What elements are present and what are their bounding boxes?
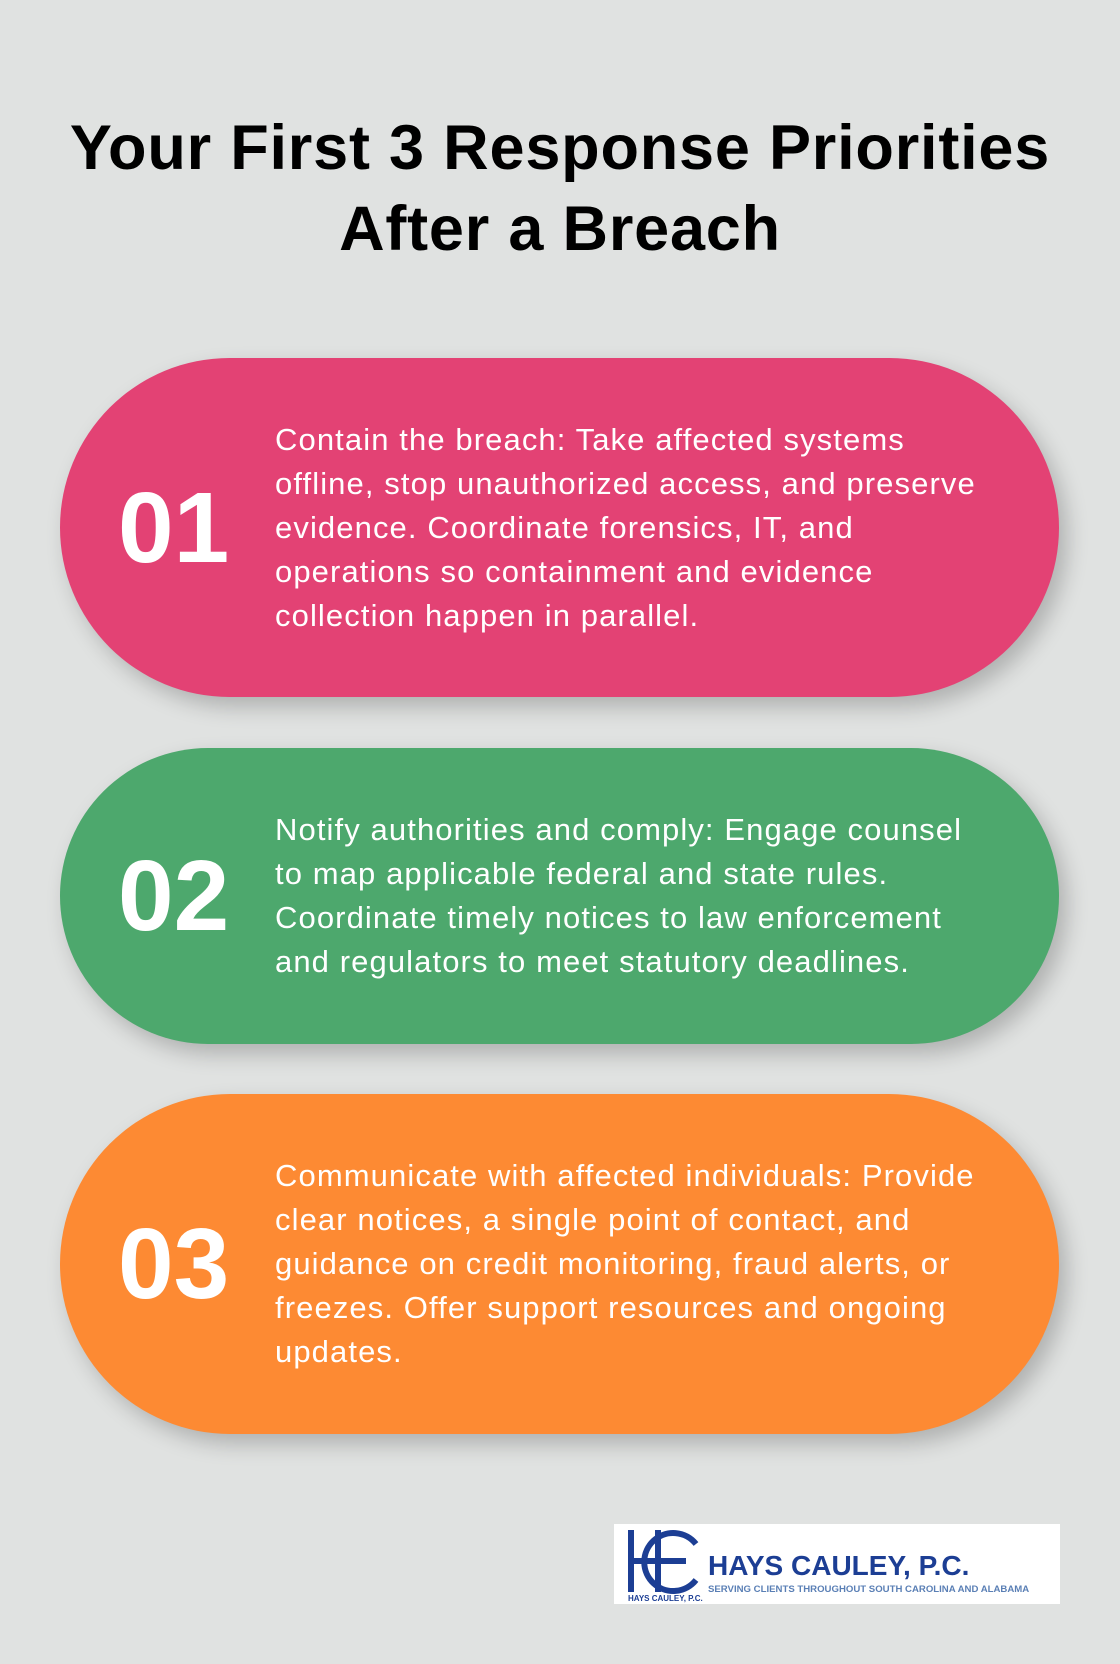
logo: SERVING CLIENTS THROUGHOUT SOUTH CAROLINA AND ALABAMA: [708, 1584, 1029, 1595]
title: Your First 3 Response Priorities: [70, 113, 1050, 183]
text: step 3: [275, 1158, 975, 1369]
text: step 2: Coordinate timely notices to law enforcement: [275, 900, 942, 935]
text: step 3: Communicate with affected individuals: Provide: [275, 1158, 975, 1193]
text: step 3: clear notices, a single point of contact, and: [275, 1202, 910, 1237]
logo: HAYS CAULEY, P.C.: [708, 1550, 969, 1581]
number 01: 01: [118, 472, 229, 584]
text: step 3: updates.: [275, 1334, 403, 1369]
text: step 2: and regulators to meet statutory deadlines.: [275, 944, 910, 979]
text: step 2: [275, 812, 962, 979]
text: step 1: Contain the breach: Take affected systems: [275, 422, 905, 456]
logo: [614, 1524, 1060, 1604]
text: step 1: offline, stop unauthorized access, and preserve: [275, 466, 976, 500]
text: step 3: guidance on credit monitoring, fraud alerts, or: [275, 1246, 950, 1281]
text: step 1: [275, 422, 976, 632]
title: [70, 113, 1050, 264]
text: step 2: Notify authorities and comply: Engage counsel: [275, 812, 962, 847]
icon: HC monogram: [631, 1530, 696, 1592]
panel: step 1: [60, 358, 1059, 697]
panel: step 2: [60, 748, 1059, 1044]
text: step 1: evidence. Coordinate forensics, IT, and: [275, 510, 854, 544]
number 03: 03: [118, 1208, 229, 1320]
text: step 2: to map applicable federal and state rules.: [275, 856, 888, 891]
number 02: 02: [118, 840, 229, 952]
logo: HAYS CAULEY, P.C.: [628, 1594, 703, 1603]
panel: step 3: [60, 1094, 1059, 1434]
text: step 1: operations so containment and evidence: [275, 554, 873, 588]
text: step 1: collection happen in parallel.: [275, 598, 699, 632]
title: After a Breach: [339, 194, 781, 264]
text: step 3: freezes. Offer support resources and ongoing: [275, 1290, 947, 1325]
